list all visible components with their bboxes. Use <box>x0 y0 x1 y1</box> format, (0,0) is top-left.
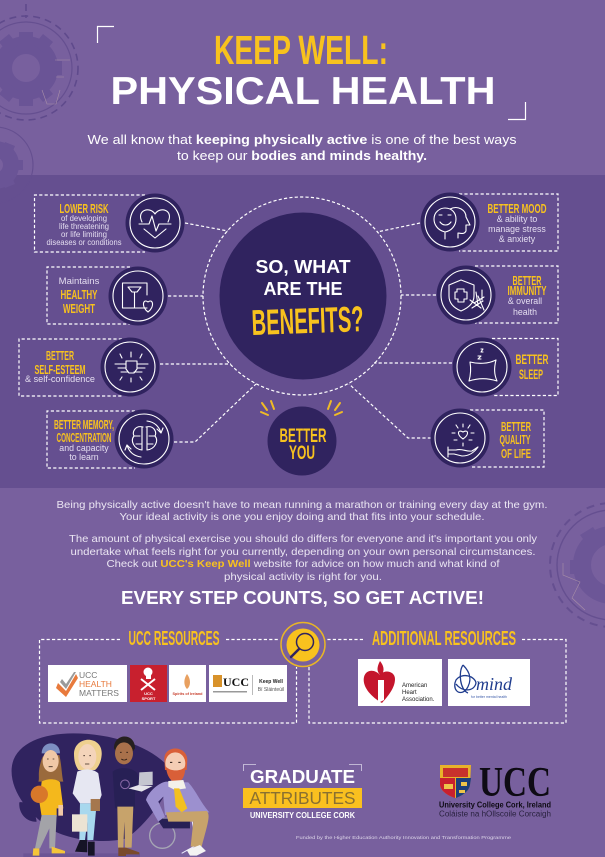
logo: UCC health matters: UCC <box>79 670 97 680</box>
call to action heading: EVERY STEP COUNTS, SO GET ACTIVE! <box>121 587 484 608</box>
benefit: better quality of life: OF LIFE <box>501 446 531 461</box>
logo: mind: for better mental health <box>471 695 507 699</box>
logo: University College Cork: UCC <box>479 760 551 806</box>
benefit: healthy weight <box>47 266 168 326</box>
benefit: better memory: BETTER MEMORY, <box>54 418 114 432</box>
icon: smiley and head profile <box>434 208 470 239</box>
body paragraph one <box>56 500 548 523</box>
icon: brain with arrows <box>125 421 163 457</box>
benefit: better quality of life <box>430 408 544 468</box>
body paragraph two: physical activity is right for you. <box>224 572 382 583</box>
benefit: lower risk: or life limiting <box>61 229 107 239</box>
logo: american heart association: American <box>402 683 427 689</box>
benefit: better memory: CONCENTRATION <box>56 431 112 445</box>
intro text: to keep our bodies and minds healthy. <box>177 148 427 163</box>
heading: UCC resources: UCC RESOURCES <box>128 628 220 650</box>
intro text: We all know that keeping physically active is one of the best ways <box>88 132 517 147</box>
benefit: better sleep: BETTER <box>516 351 548 367</box>
logo: spirits of ireland: Spirits of Ireland <box>173 692 203 696</box>
body paragraph two: undertake what feels right for you currently, depending on your own personal circumstances. <box>70 547 536 558</box>
title: physical health: PHYSICAL HEALTH <box>110 70 496 113</box>
decorative gear right <box>550 503 605 627</box>
logo: graduate attributes <box>243 764 362 820</box>
logo: University College Cork: University College Cork, Ireland <box>439 800 551 810</box>
benefit: better immunity: IMMUNITY <box>508 283 547 298</box>
body paragraph two <box>69 534 538 583</box>
floor shadows <box>23 853 140 857</box>
background blob <box>12 733 172 841</box>
icon: magnifying glass <box>281 622 325 666</box>
benefit: healthy weight: Maintains <box>59 276 100 287</box>
logo: graduate attributes: UNIVERSITY COLLEGE CORK <box>250 811 355 820</box>
logo: UCC sport: SPORT <box>142 696 156 701</box>
logo: UCC health matters: HEALTH <box>79 679 112 689</box>
logo: american heart association: Heart <box>402 690 417 696</box>
benefit: better immunity: health <box>513 307 537 317</box>
benefit: better immunity <box>436 266 558 324</box>
icon: fist with wings <box>115 352 148 382</box>
better you circle <box>261 401 342 476</box>
benefit: better memory: to learn <box>69 452 99 462</box>
benefit: better sleep: SLEEP <box>519 366 543 382</box>
icon: pillow with z's <box>469 349 497 381</box>
body paragraph one: Your ideal activity is one you enjoy doing and that fits into your schedule. <box>120 512 484 523</box>
title bracket top left <box>98 26 114 43</box>
illustration: students group <box>12 733 209 857</box>
logo: UCC sport: UCC <box>144 691 153 696</box>
central circle: so what are the benefits: ARE THE <box>264 279 342 299</box>
panel: UCC resources <box>40 628 296 723</box>
logo: spirits of ireland <box>169 665 206 702</box>
logo: UCC health matters <box>48 665 127 702</box>
logo: University College Cork: Coláiste na hOllscoile Corcaigh <box>439 810 551 818</box>
benefit: lower risk: diseases or conditions <box>46 237 122 247</box>
benefits band background <box>0 175 605 488</box>
benefit: better self-esteem <box>19 338 160 396</box>
person: wheelchair user <box>146 749 209 856</box>
funding note: Funded by the Higher Education Authority Innovation and Transformation Programme <box>296 835 512 840</box>
logo: american heart association <box>358 659 442 706</box>
benefit: better immunity: & overall <box>508 296 542 306</box>
benefit: better mood <box>420 192 558 252</box>
benefit: better quality of life: BETTER <box>501 419 531 434</box>
benefit: lower risk <box>34 194 184 252</box>
benefit: better mood: & anxiety <box>499 234 536 244</box>
better you circle: YOU <box>289 443 315 464</box>
body paragraph two: Check out UCC's Keep Well website for advice on how much and what kind of <box>106 559 500 570</box>
logo: UCC sport <box>130 665 167 702</box>
central circle: so what are the benefits: BENEFITS? <box>251 298 364 343</box>
crest shield <box>440 765 471 798</box>
logo: american heart association: Association. <box>402 697 435 703</box>
decorative gear lower left <box>0 127 33 203</box>
benefit: better self-esteem: BETTER <box>46 348 74 363</box>
benefit: better self-esteem: & self-confidence <box>25 374 95 384</box>
logo: mind: mind <box>476 674 513 694</box>
logo: graduate attributes: ATTRIBUTES <box>250 788 356 808</box>
icon: hand holding heart <box>448 424 478 457</box>
logo: graduate attributes: GRADUATE <box>250 767 355 787</box>
logo: UCC keep well: UCC <box>223 675 249 689</box>
logo: UCC keep well <box>209 665 287 702</box>
benefit: better mood: BETTER MOOD <box>488 201 546 216</box>
logo: UCC keep well: Bí Sláinteúil <box>258 687 284 693</box>
panel: additional resources <box>309 628 566 723</box>
benefit: better mood: & ability to <box>497 214 537 224</box>
title: keep well: KEEP WELL: <box>214 27 388 73</box>
benefit: healthy weight: HEALTHY <box>60 287 98 302</box>
benefit: better mood: manage stress <box>488 224 546 234</box>
logo: UCC keep well: Keep Well <box>259 679 284 685</box>
body paragraph one: Being physically active doesn't have to mean running a marathon or training every day at the gym. <box>56 500 548 511</box>
body paragraph two: The amount of physical exercise you should do differs for everyone and it's important you only <box>69 534 538 545</box>
connector lines and outer dashed ring <box>160 197 452 442</box>
benefit: better immunity: BETTER <box>512 273 542 288</box>
person: student with laptop <box>113 736 153 856</box>
icon: scale with heart <box>122 283 153 312</box>
decorative gear top left <box>0 4 78 120</box>
benefit: healthy weight: WEIGHT <box>63 301 95 316</box>
logo: mind <box>448 659 530 706</box>
benefit: lower risk: life threatening <box>59 221 109 231</box>
icon: heart with pulse <box>139 210 171 238</box>
benefit: better quality of life: QUALITY <box>500 432 531 447</box>
logo: UCC health matters: MATTERS <box>79 688 119 698</box>
better you circle: BETTER <box>280 426 327 447</box>
central circle: so what are the benefits <box>220 212 386 380</box>
benefit: better memory <box>47 410 174 468</box>
central circle: so what are the benefits: SO, WHAT <box>256 257 351 277</box>
benefit: better memory: and capacity <box>59 443 109 453</box>
benefit: lower risk: of developing <box>61 213 107 223</box>
person: student with tote bag <box>72 740 102 856</box>
benefit: better sleep <box>452 338 558 396</box>
person: student with basketball <box>31 743 65 856</box>
icon: shield and virus <box>449 280 484 311</box>
title bracket bottom right <box>508 102 526 120</box>
benefit: lower risk: LOWER RISK <box>60 201 109 216</box>
benefit: better self-esteem: SELF-ESTEEM <box>34 362 86 377</box>
logo: University College Cork <box>439 760 551 818</box>
intro text <box>88 132 517 163</box>
